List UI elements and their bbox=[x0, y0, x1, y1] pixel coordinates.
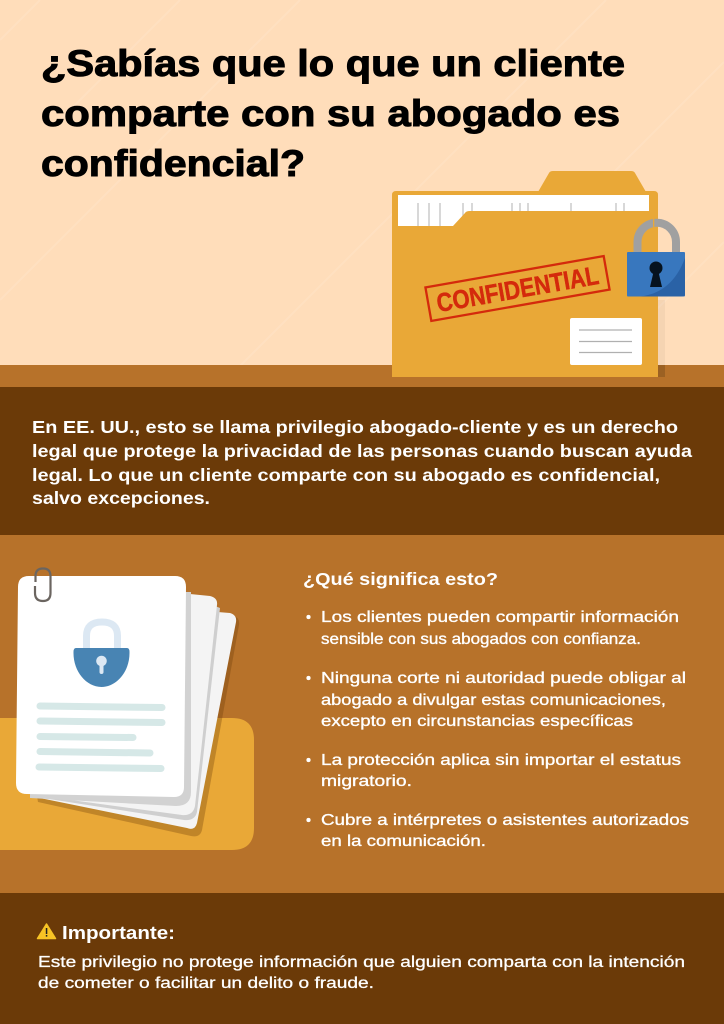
icon: documents with lock bbox=[16, 568, 239, 836]
lock bbox=[73, 622, 130, 687]
panel: meaning bbox=[0, 535, 724, 893]
bullet 1: sensible con sus abogados con confianza. bbox=[321, 631, 641, 648]
label card bbox=[570, 318, 642, 365]
warning text: Este privilegio no protege información que alguien comparta con la intención bbox=[38, 954, 685, 971]
title: ¿Sabías que lo que un cliente bbox=[41, 43, 625, 84]
title: comparte con su abogado es bbox=[41, 93, 620, 134]
back pages bbox=[30, 592, 239, 836]
bullet 3: migratorio. bbox=[321, 773, 412, 790]
heading: important: Importante: bbox=[62, 923, 175, 943]
icon: paper clip bbox=[35, 568, 50, 601]
bullet 2: excepto en circunstancias específicas bbox=[321, 713, 633, 730]
panel: intro bbox=[0, 387, 724, 535]
bullet 2: abogado a divulgar estas comunicaciones, bbox=[321, 692, 666, 709]
title: confidencial? bbox=[41, 143, 305, 184]
bullet 2: Ninguna corte ni autoridad puede obligar al bbox=[321, 670, 686, 687]
panel: important bbox=[0, 893, 724, 1024]
title bbox=[41, 43, 625, 184]
bullet 4: en la comunicación. bbox=[321, 833, 486, 850]
intro text bbox=[32, 417, 692, 508]
bullet 4 bbox=[306, 812, 689, 850]
stamp: confidential: CONFIDENTIAL bbox=[434, 260, 601, 318]
intro text: En EE. UU., esto se llama privilegio abogado-cliente y es un derecho bbox=[32, 417, 678, 437]
intro text: legal. Lo que un cliente comparte con su abogado es confidencial, bbox=[32, 465, 660, 485]
front page bbox=[16, 576, 186, 797]
panel: header background bbox=[0, 0, 724, 388]
highlight block bbox=[0, 718, 254, 850]
warning text: de cometer o facilitar un delito o fraude. bbox=[38, 975, 374, 992]
bullet 1: Los clientes pueden compartir información bbox=[321, 609, 679, 626]
intro text: salvo excepciones. bbox=[32, 488, 210, 508]
warning text bbox=[38, 954, 685, 992]
bullet 3 bbox=[306, 752, 681, 790]
text lines bbox=[39, 706, 162, 768]
intro text: legal que protege la privacidad de las personas cuando buscan ayuda bbox=[32, 441, 692, 461]
bullet list bbox=[306, 609, 689, 850]
icon: blue padlock bbox=[627, 217, 685, 296]
bullet 2 bbox=[306, 670, 686, 730]
bullet 3: La protección aplica sin importar el estatus bbox=[321, 752, 681, 769]
bullet 1 bbox=[306, 609, 679, 648]
icon: warning bbox=[38, 924, 56, 938]
heading: what it means: ¿Qué significa esto? bbox=[303, 569, 498, 589]
icon: confidential folder bbox=[392, 171, 685, 377]
bullet 4: Cubre a intérpretes o asistentes autorizados bbox=[321, 812, 689, 829]
